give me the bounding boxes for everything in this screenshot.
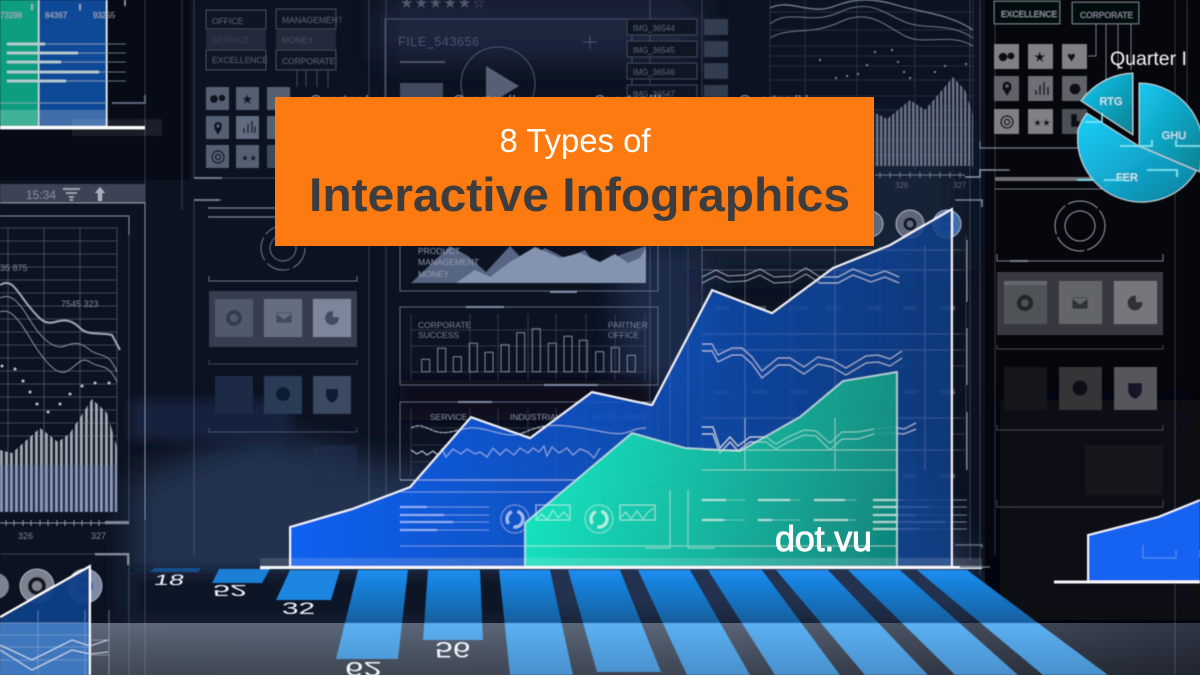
tile: mail [264, 299, 302, 337]
panel: dashboard buttons and icons [194, 9, 370, 200]
panel: corporate bar chart: PARTNER [608, 320, 648, 330]
panel: mountain chart: MONEY [418, 269, 450, 279]
quarter title: Quarter I [1110, 48, 1187, 70]
title line two: Interactive Infographics [309, 168, 850, 221]
title banner [275, 97, 874, 246]
button: corporate [1072, 2, 1139, 24]
panel: left phone chart: 7545 323 [61, 299, 99, 309]
base glow strip [260, 558, 982, 567]
button: corporate: CORPORATE [282, 56, 336, 66]
dial two [585, 505, 613, 533]
image list: IMG_36545 [633, 46, 675, 55]
button: service [206, 30, 266, 49]
up arrow icon [95, 187, 105, 201]
axis numbers row one: 576753 [790, 306, 808, 312]
bar reflection [276, 570, 340, 600]
small value labels: 35 875 [0, 263, 28, 273]
logo: dot.vu: dot.vu [775, 518, 872, 559]
title line one: 8 Types of [500, 122, 651, 159]
tile: pie [1114, 281, 1157, 324]
fragment baseline [1054, 580, 1200, 584]
pie chart [1077, 48, 1200, 202]
overlay service wave on blue [400, 425, 660, 480]
play button [461, 47, 535, 121]
panel: top-right wave chart: 327 [953, 181, 967, 190]
slice: RTG [1081, 73, 1133, 135]
slice: FER [1077, 113, 1197, 202]
button: management [276, 9, 343, 29]
panel: mountain chart: MANAGEMENT [418, 257, 479, 267]
overlay dial and rule details on blue [400, 492, 670, 546]
code strings: 765635423454234 [758, 527, 800, 533]
curves [0, 283, 120, 350]
ring icons row [857, 200, 982, 238]
value: 52 [213, 581, 247, 599]
quarter labels behind title: Quarter III [594, 92, 662, 109]
axis numbers row two: 63257 [826, 390, 841, 396]
panel: service wave chart: INDUSTRIAL [510, 412, 561, 422]
panel: corporate bar chart [400, 306, 658, 386]
panel: settings tiles left [208, 208, 357, 490]
value: 32 [282, 599, 315, 618]
panel: top-left chart [0, 0, 162, 136]
axis numbers row one [714, 306, 955, 312]
scatter dots [2, 366, 109, 412]
mountain layer back [411, 246, 646, 283]
ring dial [261, 226, 305, 270]
bar reflection [212, 569, 270, 583]
panel: file player [385, 0, 728, 139]
row labels: PRODUCT [418, 246, 460, 256]
panel: left phone chart: 327 [91, 531, 106, 541]
tile band [997, 272, 1163, 335]
file name: FILE_543656 [398, 35, 480, 49]
ring icons [0, 569, 102, 603]
button: office [206, 10, 266, 29]
button: excellence [994, 1, 1060, 24]
button: money: MONEY [282, 35, 314, 45]
dial one [501, 505, 529, 533]
panel: center-right wave charts [645, 235, 967, 548]
button: excellence: EXCELLENCE [1001, 9, 1058, 19]
icon grid: ♥ [1067, 49, 1076, 66]
overlay wave lines [702, 268, 916, 453]
axis numbers row two: 93255 [940, 390, 955, 396]
panel: center lower dials [400, 491, 670, 546]
axis numbers row two: 84367 [903, 390, 918, 396]
value: 18 [152, 571, 186, 588]
axis numbers row three: 34343 [714, 474, 729, 480]
icon grid: ★★ [241, 153, 257, 163]
panel: corporate bar chart: SUCCESS [418, 330, 459, 340]
clock text: 15:34 [26, 188, 56, 202]
icon grid: ★ [241, 91, 254, 107]
tile: shield [1114, 367, 1157, 410]
area chart: large blue series [290, 209, 952, 567]
quarter labels behind title: Quarter IV [739, 92, 808, 109]
image list: IMG_36547 [633, 90, 675, 99]
axis numbers row two: 73298 [866, 390, 881, 396]
axis numbers row two [714, 390, 955, 396]
slice: GHU [1139, 83, 1200, 172]
axis numbers row three: 84367 [903, 474, 918, 480]
code strings: 543565454768754 [702, 507, 744, 513]
button: money [276, 30, 336, 49]
axis numbers row one: 73298 [866, 306, 881, 312]
chart: right blue area fragment [1054, 500, 1200, 584]
heading labels: CORPORATE [418, 320, 472, 330]
tile: shield [313, 376, 351, 414]
floor band [0, 623, 1200, 675]
axis numbers row three: 576753 [790, 474, 808, 480]
icon grid [206, 87, 290, 168]
code strings: 958783654747667 [758, 507, 800, 513]
button: corporate: CORPORATE [1080, 10, 1134, 20]
code strings [702, 507, 858, 533]
button: management: MANAGEMENT [282, 15, 343, 25]
axis numbers row three: 93255 [940, 474, 955, 480]
button: excellence [206, 50, 269, 70]
mountain layer front [456, 247, 646, 283]
value: 56 [435, 637, 470, 662]
panel: top-left chart: 84367 [45, 11, 68, 20]
axis numbers row one: 63257 [826, 306, 841, 312]
image list: IMG_36546 [633, 68, 675, 77]
slice: FER: FER [1116, 172, 1138, 184]
overlay panel lines on blue [670, 230, 960, 560]
panel: top-left chart: 93255 [93, 11, 116, 20]
axis labels: 73298 [0, 11, 23, 20]
tile: mail [1059, 281, 1102, 324]
code strings: 2345465765765674 [813, 507, 858, 513]
button: excellence: EXCELLENCE [212, 55, 269, 65]
axis numbers row three: 73298 [866, 474, 881, 480]
reflected bar chart [149, 568, 1108, 675]
panel: top-right wave chart [770, 0, 1009, 190]
quarter labels behind title: Quarter II [453, 92, 516, 109]
blue column [38, 0, 107, 127]
panel: bottom-left chart [0, 553, 129, 675]
bar reflection [149, 568, 201, 572]
axis numbers row two: 45466 [751, 390, 766, 396]
panel: corporate bar chart: OFFICE [608, 330, 639, 340]
striped spike chart [874, 77, 973, 166]
tile band [209, 291, 357, 347]
chart baseline [260, 566, 982, 569]
button: corporate [276, 50, 336, 70]
axis numbers row one: 84367 [903, 306, 918, 312]
dial captions: 634343-53-654 [535, 528, 569, 534]
quarter labels behind title: Quarter I [310, 92, 369, 109]
labels: SERVICE [430, 412, 467, 422]
ring dial [1055, 201, 1105, 251]
axis numbers row three [714, 474, 955, 480]
status bar [0, 184, 145, 203]
filter icon [63, 189, 80, 200]
panel: center lower dials: 434343-54-6234 [619, 528, 656, 534]
icon grid: ★★ [1033, 118, 1051, 129]
axis numbers row one: 93255 [940, 306, 955, 312]
panel: right dashboard [955, 1, 1163, 567]
tile: gear [1004, 281, 1047, 324]
tile: clock [1059, 367, 1102, 410]
tile: clock [264, 376, 302, 414]
axis numbers row two: 576753 [790, 390, 808, 396]
text line block [702, 500, 856, 520]
image list [627, 19, 728, 101]
panel: service wave chart: EXCELLENCE [592, 412, 649, 422]
overlay details on green [525, 418, 897, 548]
axis numbers row three: 63257 [826, 474, 841, 480]
panel: mountain chart [400, 240, 658, 293]
panel: left phone chart [0, 184, 145, 541]
axis numbers row one: 34343 [714, 306, 729, 312]
striped area chart [0, 399, 117, 512]
slice: GHU: GHU [1162, 130, 1186, 142]
axis labels: 326 [895, 181, 909, 190]
icon grid [994, 44, 1087, 134]
panel: service wave chart [400, 401, 658, 481]
axis numbers row two: 34343 [714, 390, 729, 396]
icon grid: ★ [1033, 49, 1046, 66]
bars [422, 329, 635, 372]
axis labels: 326 [18, 531, 33, 541]
image list: IMG_36544 [633, 24, 675, 33]
blue area fragment [0, 566, 90, 675]
button: office: OFFICE [212, 16, 243, 26]
code strings: 654578644354655 [702, 527, 744, 533]
slice: RTG: RTG [1099, 96, 1123, 108]
teal column [0, 0, 38, 127]
tile: pie [313, 299, 351, 337]
tile: gear [215, 299, 253, 337]
axis numbers row three: 45466 [751, 474, 766, 480]
code strings: 665423454465546 [813, 527, 855, 533]
quarter labels behind title [310, 92, 808, 109]
area chart: green series [525, 372, 897, 567]
axis numbers row one: 45466 [751, 306, 766, 312]
button: service: SERVICE [212, 35, 249, 45]
